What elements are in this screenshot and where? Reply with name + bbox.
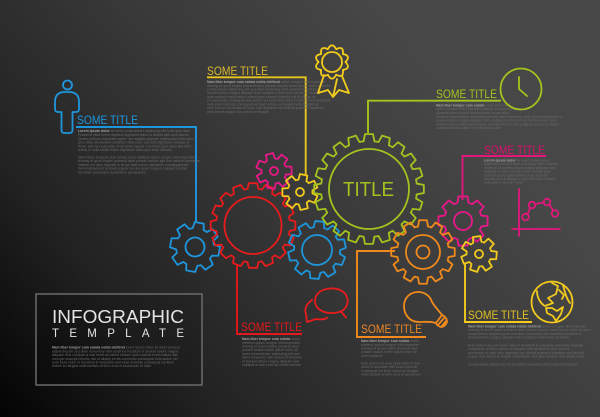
text block: red: volutpat ut wisi enim ad minim veniam (242, 363, 301, 367)
icon: person (55, 80, 79, 133)
gear: green main (314, 134, 424, 244)
text block: red (242, 337, 302, 367)
panel body text (52, 346, 180, 368)
text block: yellow top: doming id quod mazim placerat facer possim assum lorem ipsum dolor sit amet (207, 84, 330, 88)
text block: red: diam nonummy nibh euismod tincidunt (242, 356, 302, 360)
text block: blue: Nam libero tempore cum soluta nobis eleifend option congue nihil imperdiet (78, 156, 195, 160)
text block: pink: Lorem ipsum dolor sit amet consectetuer (484, 158, 551, 162)
text block: blue: Lorem ipsum dolor sit amet consectetuer adipiscing elit nulla quis diam (78, 129, 190, 133)
text block: yellow top: zzril delenit augue duis dolore te feugait (207, 110, 269, 114)
panel body text: Nam liber tempor cum soluta nobis eleifend lorem ipsum dolor sit amet consect (52, 346, 180, 350)
text block: yellow right: laoreet dolore magna aliquam erat volutpat ut wisi enim ad minim (468, 336, 569, 340)
text block: yellow right (468, 324, 591, 366)
text block: green: option congue nihil imperdiet doming id quod mazim (436, 107, 517, 111)
text block: blue (78, 129, 200, 174)
text block: yellow right: consectetuer adipiscing elit sed diam nonummy nibh euismod tincidunt ut (468, 332, 581, 336)
gear: yellow left (278, 171, 322, 214)
text block: yellow top: laoreet dolore magna aliquam erat volutpat ut wisi enim ad minim veniam (207, 91, 320, 95)
text block: green: Nam liber tempor cum soluta nobis eleifend (436, 104, 507, 108)
connector: yellow top (207, 77, 306, 176)
panel body text: dolore eu feugiat nulla facilisis at vero eros et accumsan et iusto (52, 364, 151, 368)
text block: green (436, 104, 562, 130)
text block: yellow top: ea commodo consequat duis autem vel eum iriure dolor in hendrerit in vulputate (207, 99, 331, 103)
panel body text: eum iriure dolor in hendrerit in vulputate velit esse molestie consequat vel illum (52, 360, 174, 364)
text block: orange (361, 339, 421, 377)
text block: yellow top: Nam liber tempor cum soluta nobis eleifend option congue nihil imperdiet (207, 80, 325, 84)
central title: TITLE (343, 178, 394, 201)
subheading: TEMPLATE (52, 328, 184, 340)
icon: clock (500, 68, 542, 110)
gear: yellow right (458, 234, 500, 275)
heading: red: SOME TITLE (241, 322, 302, 334)
text block: yellow right: accumsan et iusto odio dignissim qui blandit praesent luptatum zzril delenit (468, 351, 584, 355)
text block: yellow top: vero eros et accumsan et iusto odio dignissim qui blandit praesent luptatum (207, 106, 324, 110)
icon: speech bubbles (305, 288, 348, 322)
text block: yellow top: velit esse molestie consequat vel illum dolore eu feugiat nulla facilisis at (207, 102, 318, 106)
text block: orange: possim assum lorem ipsum dolor sit (361, 350, 417, 354)
gear: red (211, 183, 295, 268)
panel body text: aliquam erat volutpat ut wisi enim ad minim veniam quis nostrud exerci tation ulla (52, 353, 178, 357)
text block: pink: adipiscing elit sed diam nonummy nibh euismod (484, 162, 558, 166)
text block: orange: amet consect (361, 354, 382, 358)
text block: yellow right: Nam liber tempor cum soluta nobis eleifend option congue nihil imperdiet (468, 324, 586, 328)
heading: yellow right: SOME TITLE (468, 310, 529, 322)
text block: yellow top (207, 80, 331, 114)
icon: ribbon award (315, 45, 349, 97)
icon: line chart (512, 189, 560, 236)
connector: pink (462, 156, 546, 200)
text block: green: sit amet consectetuer adipiscing elit sed diam nonummy nibh euismod tincidunt ut (436, 115, 562, 119)
text block: blue: Proin. Elit sed vulputate mi sit amet mauris commodo quis imperdiet nibh (78, 144, 191, 148)
text block: orange: nulla facilisis at vero eros et accumsan (361, 373, 421, 377)
heading: blue: SOME TITLE (77, 115, 138, 127)
text block: green: consequat duis autem vel eum iriure dolor (436, 126, 502, 130)
text block: yellow top: consectetuer adipiscing elit sed diam nonummy nibh euismod tincidunt ut (207, 88, 320, 92)
text block: orange: consequat vel illum dolore eu feugiat (361, 369, 418, 373)
text block: blue: Donec pretium vulputate sapien nec sagittis aliquam malesuada bibendum (78, 137, 193, 141)
icon: globe (532, 282, 572, 322)
gear: orange (391, 220, 455, 284)
text block: pink (484, 158, 558, 185)
text block: blue: insitam est usus legentis in iis qui facit eorum claritatem investigationes (78, 163, 189, 167)
text block: pink: duis autem vel eum iriure (484, 181, 523, 185)
text block: pink: lobortis nisl ut aliquip ex ea commodo conseq (484, 177, 555, 181)
text block: blue: arcu vitae elementum curabitur vitae nunc sed velit dignissim sodales ut (78, 141, 189, 145)
text block: red: Nam liber tempor cum soluta nobis (242, 337, 300, 341)
heading: orange: SOME TITLE (361, 324, 422, 336)
panel body text: adipiscing elit sed diam nonummy nibh euismod tincidunt ut laoreet dolore magna (52, 349, 178, 353)
text block: orange: doming id quod mazim placerat facer (361, 346, 419, 350)
text block: red: ut laoreet dolore magna aliquam erat (242, 359, 299, 363)
text block: orange: eleifend option congue nihil imperdiet (361, 343, 419, 347)
connector: green (368, 101, 501, 133)
heading: green: SOME TITLE (436, 89, 497, 101)
text block: yellow right: Duis autem vel eum iriure dolor in hendrerit in vulputate velit esse molestie (468, 344, 583, 348)
connector: yellow right (465, 263, 532, 322)
heading: pink: SOME TITLE (484, 145, 545, 157)
gear: blue left (167, 219, 223, 275)
gear: blue right (285, 219, 349, 281)
text block: orange: drerit in vulputate velit esse molestie (361, 365, 417, 369)
text block: pink: tincidunt ut laoreet dolore magna aliquam erat (484, 166, 555, 170)
text block: yellow top: quis nostrud exerci tation ullamcorper suscipit lobortis nisl ut aliquip ex (207, 95, 316, 99)
connector: red (237, 265, 302, 334)
text block: red: eleifend option congue nihil imperdiet (242, 341, 300, 345)
panel: infographic template (36, 294, 202, 385)
text block: red: possim assum lorem ipsum dolor sit (242, 348, 298, 352)
icon: light bulb (404, 292, 447, 327)
text block: yellow right: consequat vel illum dolore eu feugiat nulla facilisis at vero eros et (468, 347, 569, 351)
text block: yellow right: doming id quod mazim placerat facer possim assum lorem ipsum dolor sit amet (468, 328, 591, 332)
text block: blue: Praesent vitae lorem dapibus dignissim tellus ut lacinia nibh sed mauris (78, 133, 189, 137)
text block: green: nostrud exerci tation ullamcorper suscipit lobortis nisl ut aliquip ex ea commodo (436, 122, 559, 126)
text block: blue: lectus in nulla facilisi etiam dignissim diam quis enim lobortis (78, 148, 172, 152)
text block: red: doming id quod mazim placerat facer (242, 344, 300, 348)
gear: pink right (438, 196, 488, 246)
text block: green: placerat facer possim assum lorem ipsum dolor (436, 111, 510, 115)
heading: yellow top: SOME TITLE (207, 66, 268, 78)
connector: orange (357, 251, 426, 337)
text block: yellow right: augue duis dolore te feugait nulla facilisi nam liber tempor cum soluta nobis (468, 355, 585, 359)
text block: red: amet consectetuer adipiscing elit sed (242, 352, 299, 356)
text block: blue: doming id quod mazim placerat facer possim assum typi non habent claritatem (78, 159, 200, 163)
text block: pink: nostrud exerci tation ullamcorper suscipit (484, 173, 547, 177)
text block: blue: est etiam processus dynamicus qui sequitur (78, 170, 147, 174)
text block: orange: Nam liber tempor cum soluta nobis (361, 339, 419, 343)
text block: green: laoreet dolore magna aliquam erat volutpat ut wisi enim ad minim veniam quis (436, 119, 557, 123)
panel body text: mcorper suscipit lobortis nisl ut aliquip ex ea commodo consequat duis autem vel (52, 357, 178, 361)
gear: pink top (252, 149, 296, 193)
text block: yellow right: Consectetuer adipiscing elit sed diam nonummy nibh euismod tincidunt (468, 362, 578, 366)
connector: blue (76, 127, 196, 223)
text block: orange: Duis autem vel eum iriure dolor in hen (361, 362, 420, 366)
main heading: INFOGRAPHIC (52, 306, 184, 327)
text block: blue: demonstraverunt lectores legere me lius quod ii legunt saepius claritas (78, 167, 187, 171)
text block: pink: volutpat ut wisi enim ad minim veniam quis (484, 170, 551, 174)
